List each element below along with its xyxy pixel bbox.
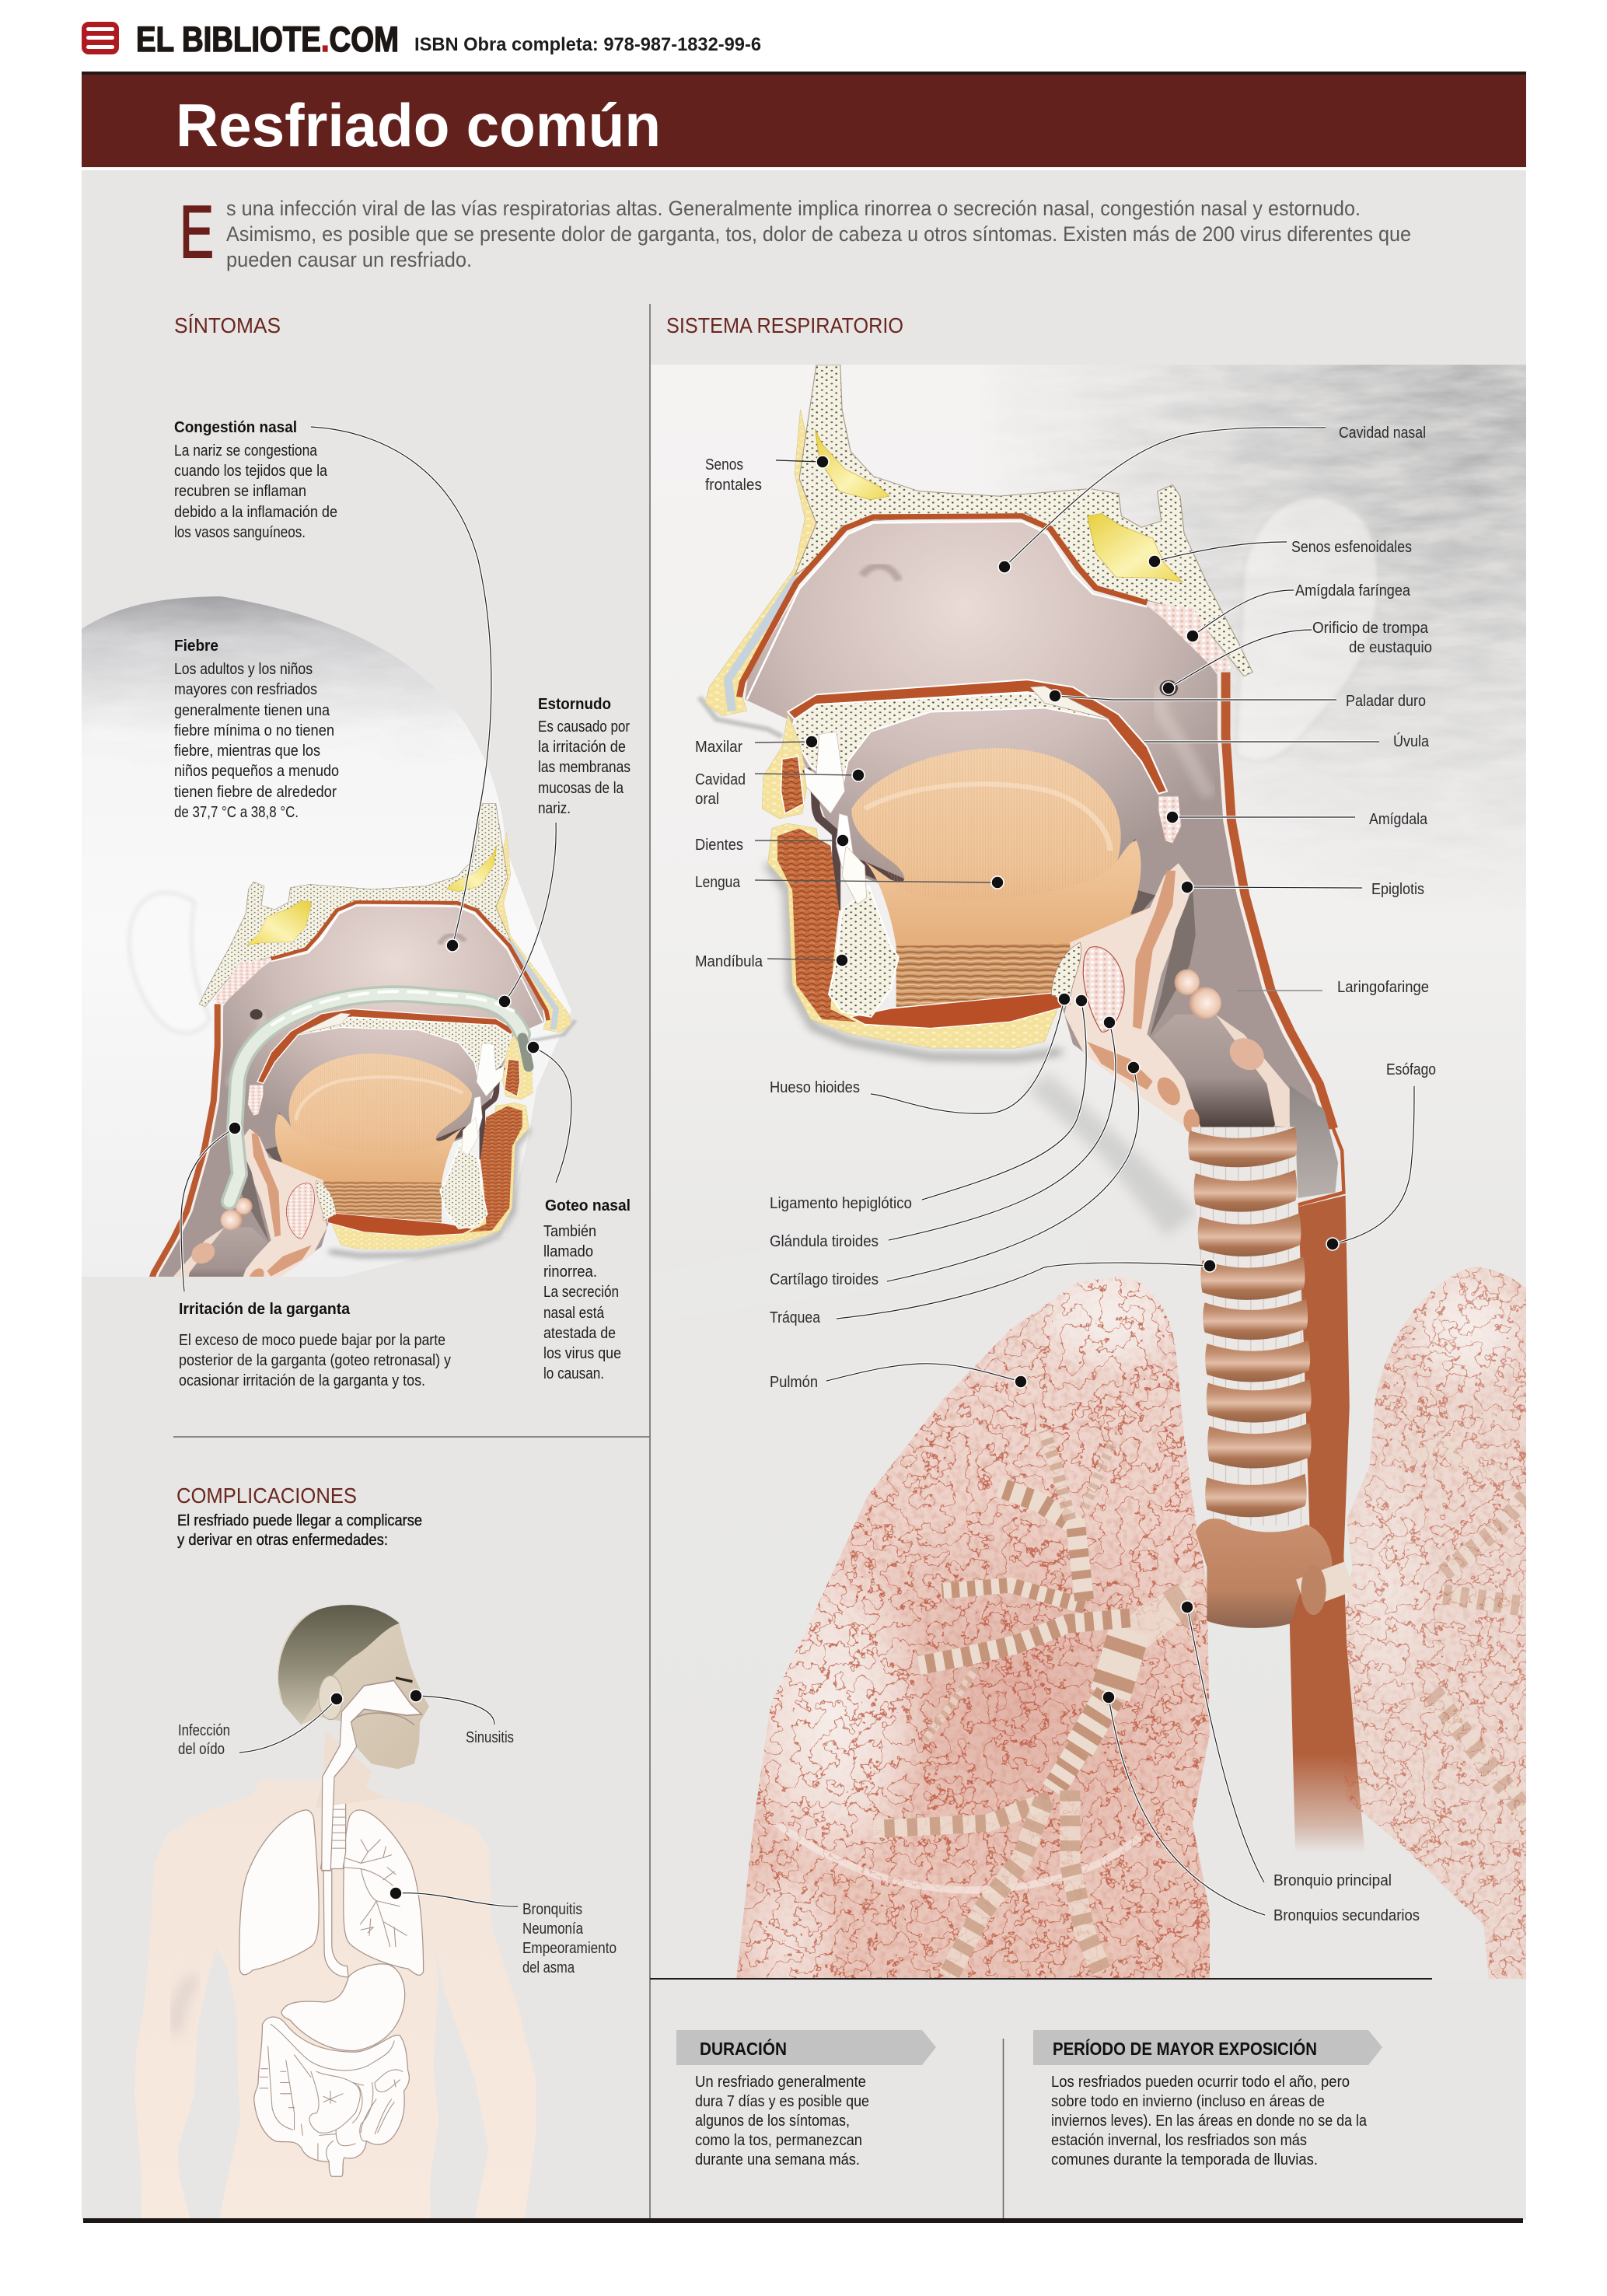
symptom: goteo nasal: nasal está xyxy=(543,1305,605,1322)
symptom: estornudo: las membranas xyxy=(538,759,631,776)
symptom: congestion nasal xyxy=(174,418,491,952)
head grain xyxy=(82,596,501,775)
symptom: fiebre: fiebre, mientras que los xyxy=(174,743,320,760)
panel: duracion: DURACIÓN xyxy=(700,2038,787,2059)
intro text: s una infección viral de las vías respiratorias altas. Generalmente implica rinorrea o secreción nasal, congestión nasal y estornudo. xyxy=(226,197,1361,220)
label: ligamento hepiglotico xyxy=(770,994,1088,1212)
label: bronquio principal xyxy=(1181,1601,1392,1889)
label: cartilago tiroides xyxy=(770,1061,1140,1288)
ear xyxy=(129,893,210,1033)
label: glandula tiroides xyxy=(770,1016,1116,1250)
label: laringofaringe: Laringofaringe xyxy=(1337,979,1429,996)
label: bronquios secundarios xyxy=(1102,1691,1420,1924)
trachea xyxy=(320,1777,346,1869)
panel: duracion: algunos de los síntomas, xyxy=(695,2113,850,2130)
symptom: goteo nasal: También xyxy=(543,1223,596,1240)
esophagus xyxy=(323,1868,348,1977)
symptom: fiebre: Fiebre xyxy=(174,637,218,655)
symptom: estornudo: la irritación de xyxy=(538,739,626,756)
pharynx lower xyxy=(1290,1085,1338,1198)
label: paladar duro xyxy=(1049,690,1426,710)
left bronchial tree xyxy=(873,1431,1196,1978)
neck and head xyxy=(278,1605,429,1871)
symptom: goteo nasal: llamado xyxy=(543,1243,593,1260)
panel: head with symptoms illustration xyxy=(82,596,575,1305)
label: pulmon xyxy=(770,1364,1027,1391)
heading: sintomas: SÍNTOMAS xyxy=(174,313,281,337)
label: paladar duro: Paladar duro xyxy=(1346,693,1426,710)
stomach xyxy=(281,1964,405,2051)
head silhouette xyxy=(82,596,571,1277)
heading: complicaciones: COMPLICACIONES xyxy=(176,1483,357,1508)
symptom: congestion nasal: cuando los tejidos que la xyxy=(174,463,328,480)
title banner xyxy=(82,72,1526,167)
label: pulmon: Pulmón xyxy=(770,1374,818,1391)
label: hueso hioides xyxy=(770,993,1071,1113)
symptom: congestion nasal: La nariz se congestiona xyxy=(174,442,318,460)
symptom: goteo nasal: rinorrea. xyxy=(543,1263,597,1281)
label: uvula: Úvula xyxy=(1393,732,1430,750)
intro text: E xyxy=(180,190,214,274)
callout: infeccion del oido: del oído xyxy=(178,1741,225,1758)
symptom: fiebre: fiebre mínima o no tienen xyxy=(174,722,334,739)
panel: periodo de mayor exposicion: sobre todo en invierno (incluso en áreas de xyxy=(1051,2093,1325,2110)
label: bronquio principal: Bronquio principal xyxy=(1273,1872,1392,1889)
panel: periodo de mayor exposicion: PERÍODO DE MAYOR EXPOSICIÓN xyxy=(1053,2038,1317,2059)
callout: infeccion del oido: Infección xyxy=(178,1722,230,1739)
label: cavidad oral: Cavidad xyxy=(695,771,746,788)
symptom: congestion nasal: recubren se inflaman xyxy=(174,483,306,500)
label: amigdala: Amígdala xyxy=(1369,811,1428,828)
label: senos frontales: Senos xyxy=(705,456,743,474)
callout: infeccion del oido xyxy=(178,1693,343,1758)
lungs xyxy=(239,1810,319,1975)
panel: respiratory system illustration xyxy=(651,365,1540,2025)
label: amigdala faringea: Amígdala faríngea xyxy=(1295,582,1411,599)
dividers xyxy=(173,304,1432,2220)
header ISBN: ISBN Obra completa: 978-987-1832-99-6 xyxy=(414,34,761,55)
label: senos frontales: frontales xyxy=(705,477,762,494)
callout: sinusitis xyxy=(410,1690,514,1746)
callout: bronquitis: del asma xyxy=(522,1959,575,1976)
label: mandibula: Mandíbula xyxy=(695,953,763,970)
label: traquea: Tráquea xyxy=(770,1309,821,1326)
label: esofago xyxy=(1326,1061,1436,1250)
symptom: congestion nasal: Congestión nasal xyxy=(174,418,297,436)
heading: complicaciones: El resfriado puede llegar a complicarse xyxy=(177,1511,422,1529)
title banner: Resfriado común xyxy=(176,91,661,159)
symptom: irritacion de la garganta xyxy=(179,1122,451,1389)
bronchi xyxy=(344,1840,407,1947)
ear xyxy=(1244,498,1377,732)
torso and arms xyxy=(134,1777,536,2220)
symptom: estornudo xyxy=(498,695,631,1008)
label: dientes xyxy=(695,834,849,854)
callout: bronquitis: Neumonía xyxy=(522,1920,584,1938)
symptom: estornudo: nariz. xyxy=(538,800,571,817)
panel: duracion: durante una semana más. xyxy=(695,2151,860,2168)
label: senos frontales xyxy=(705,456,829,494)
bottom rule xyxy=(83,2218,1523,2223)
symptom: goteo nasal: lo causan. xyxy=(543,1365,604,1382)
label: glandula tiroides: Glándula tiroides xyxy=(770,1233,879,1250)
callout: bronquitis: Bronquitis xyxy=(522,1901,582,1918)
symptom: goteo nasal: atestada de xyxy=(543,1325,616,1342)
label: orificio de trompa de eustaquio xyxy=(1162,620,1432,694)
panel: periodo de mayor exposicion: estación invernal, los resfriados son más xyxy=(1051,2132,1307,2149)
label: cavidad nasal: Cavidad nasal xyxy=(1339,425,1426,442)
symptom: fiebre: de 37,7 °C a 38,8 °C. xyxy=(174,804,299,821)
label: senos esfenoidales: Senos esfenoidales xyxy=(1291,539,1412,556)
mucus xyxy=(229,991,529,1201)
symptom: congestion nasal: los vasos sanguíneos. xyxy=(174,524,306,541)
symptom: fiebre: tienen fiebre de alrededor xyxy=(174,784,337,801)
label: ligamento hepiglotico: Ligamento hepiglótico xyxy=(770,1195,912,1212)
label: senos esfenoidales xyxy=(1148,539,1412,568)
label: epiglotis: Epiglotis xyxy=(1371,881,1424,898)
label: mandibula xyxy=(695,953,848,970)
figure: human body with organs xyxy=(134,1605,536,2220)
label: lengua: Lengua xyxy=(695,874,741,891)
panel: periodo de mayor exposicion: inviernos leves). En las áreas en donde no se da la xyxy=(1051,2113,1368,2130)
symptom: fiebre: niños pequeños a menudo xyxy=(174,763,339,780)
background skin xyxy=(651,365,1526,1009)
intro text xyxy=(180,190,1411,274)
symptom: irritacion de la garganta: ocasionar irritación de la garganta y tos. xyxy=(179,1372,425,1389)
symptom: estornudo: Es causado por xyxy=(538,718,630,736)
symptom: fiebre: generalmente tienen una xyxy=(174,702,330,719)
label: orificio de trompa de eustaquio: de eustaquio xyxy=(1349,639,1432,656)
panel: duracion: Un resfriado generalmente xyxy=(695,2074,866,2091)
label: amigdala faringea xyxy=(1186,582,1411,642)
heading: sistema respiratorio: SISTEMA RESPIRATORIO xyxy=(666,313,903,337)
panel: periodo de mayor exposicion xyxy=(1033,2030,1382,2168)
label: lengua xyxy=(695,874,1004,891)
label: dientes: Dientes xyxy=(695,837,743,854)
symptom: irritacion de la garganta: posterior de la garganta (goteo retronasal) y xyxy=(179,1352,451,1369)
panel: periodo de mayor exposicion: Los resfriados pueden ocurrir todo el año, pero xyxy=(1051,2074,1350,2091)
right main bronchus xyxy=(1301,1576,1350,1594)
symptom: fiebre: Los adultos y los niños xyxy=(174,661,313,678)
label: orificio de trompa de eustaquio: Orificio de trompa xyxy=(1312,620,1429,637)
panel: periodo de mayor exposicion: comunes durante la temporada de lluvias. xyxy=(1051,2151,1318,2168)
left lung xyxy=(737,1276,1210,1978)
esophagus xyxy=(1290,1195,1365,1853)
top right hair shading xyxy=(1098,365,1526,765)
label: epiglotis xyxy=(1181,881,1424,898)
right bronchial tree xyxy=(1415,1442,1540,1817)
symptom: irritacion de la garganta: Irritación de la garganta xyxy=(179,1300,351,1318)
label: cartilago tiroides: Cartílago tiroides xyxy=(770,1271,879,1288)
panel: duracion xyxy=(676,2030,936,2168)
cross section mirrored xyxy=(144,803,575,1305)
heading: complicaciones xyxy=(176,1483,422,1549)
carina xyxy=(1196,1518,1333,1628)
intro text: pueden causar un resfriado. xyxy=(226,248,472,271)
symptom: goteo nasal xyxy=(527,1041,631,1382)
label: amigdala xyxy=(1166,811,1428,828)
panel: duracion: dura 7 días y es posible que xyxy=(695,2093,869,2110)
symptom: congestion nasal: debido a la inflamación de xyxy=(174,504,337,521)
label: traquea xyxy=(770,1260,1216,1326)
label: maxilar: Maxilar xyxy=(695,739,742,756)
symptom: fiebre: mayores con resfriados xyxy=(174,681,317,698)
panel: duracion: como la tos, permanezcan xyxy=(695,2132,862,2149)
symptom: estornudo: mucosas de la xyxy=(538,780,624,797)
symptom: irritacion de la garganta: El exceso de moco puede bajar por la parte xyxy=(179,1332,445,1349)
symptom: goteo nasal: los virus que xyxy=(543,1345,621,1362)
label: bronquios secundarios: Bronquios secundarios xyxy=(1273,1907,1420,1924)
right lung xyxy=(1343,1267,1526,1979)
symptom: goteo nasal: Goteo nasal xyxy=(545,1197,631,1214)
symptom: fiebre xyxy=(174,637,339,821)
lungs and trachea xyxy=(731,1085,1540,2025)
label: cavidad oral: oral xyxy=(695,791,719,808)
trachea xyxy=(1188,1127,1312,1525)
header logo: El Biblioteca: EL BIBLIOTE.COM xyxy=(136,19,399,59)
colon xyxy=(254,2017,409,2176)
label: hueso hioides: Hueso hioides xyxy=(770,1079,860,1096)
label: cavidad nasal xyxy=(998,425,1426,573)
callout: sinusitis: Sinusitis xyxy=(466,1729,514,1746)
label: cavidad oral xyxy=(695,769,865,808)
label: esofago: Esófago xyxy=(1386,1061,1436,1078)
label: maxilar xyxy=(695,736,818,756)
callout: bronquitis: Empeoramiento xyxy=(522,1940,617,1957)
neck shading xyxy=(1026,1073,1197,1236)
symptom: estornudo: Estornudo xyxy=(538,695,611,713)
symptom: goteo nasal: La secreción xyxy=(543,1284,619,1301)
heading: complicaciones: y derivar en otras enfermedades: xyxy=(177,1531,388,1549)
intro text: Asimismo, es posible que se presente dolor de garganta, tos, dolor de cabeza u otros síntomas. Existen más de 200 virus diferentes que xyxy=(226,222,1411,246)
callout: bronquitis xyxy=(390,1887,617,1976)
nasal and oral cross section xyxy=(700,365,1333,1133)
